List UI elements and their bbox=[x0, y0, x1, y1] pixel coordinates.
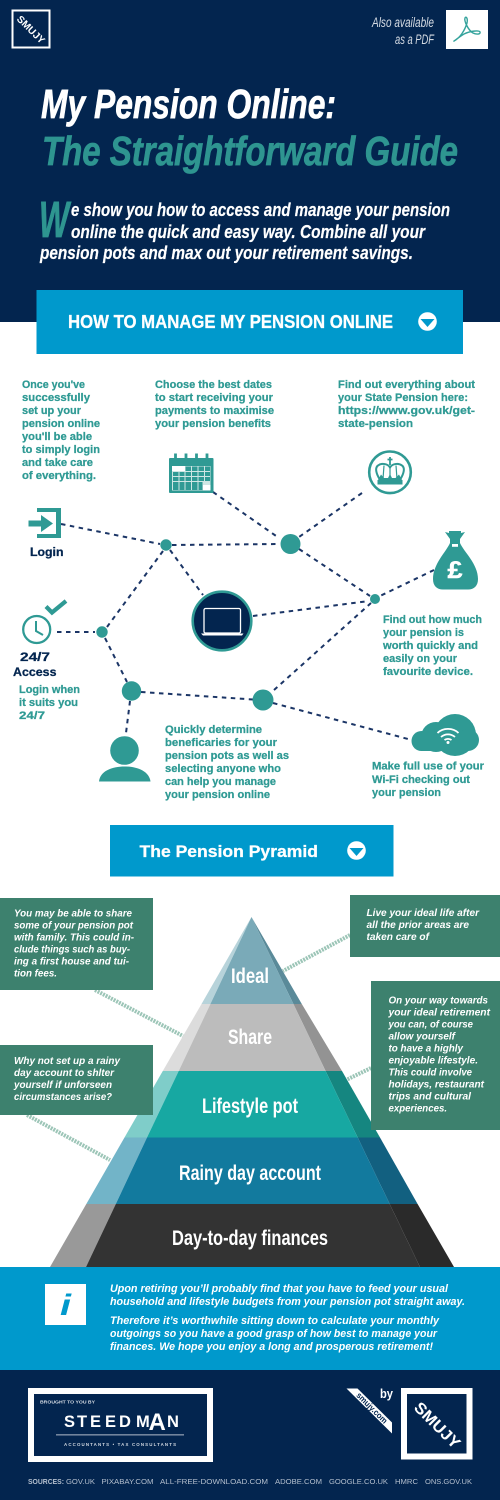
banner: pension pyramid: The Pension Pyramid bbox=[140, 842, 318, 861]
text: beneficiaries bbox=[165, 724, 289, 801]
chart: network connections bbox=[57, 492, 434, 739]
text: available as PDF bbox=[371, 15, 435, 47]
pyramid tier: rainy day account: Rainy day account bbox=[179, 1162, 321, 1185]
callout: lifestyle: to have a highly bbox=[388, 1044, 464, 1054]
text: introduction: W bbox=[39, 191, 71, 248]
pyramid tier: share bbox=[163, 1004, 342, 1071]
text: set up: successfully bbox=[22, 392, 90, 404]
text: set up: you'll be able bbox=[22, 431, 92, 443]
callout: lifestyle: On your way towards bbox=[388, 996, 488, 1006]
logo: Steedman: BROUGHT TO YOU BY bbox=[40, 1400, 95, 1404]
logo: Steedman: ACCOUNTANTS • TAX CONSULTANTS bbox=[64, 1442, 176, 1447]
callout: rainy day bbox=[0, 1045, 153, 1115]
text: how much bbox=[382, 614, 482, 678]
text: best dates: your pension benefits bbox=[155, 418, 271, 430]
text: sources: SOURCES: bbox=[28, 1477, 64, 1486]
icon: calendar bbox=[169, 454, 214, 493]
text: set up: pension online bbox=[22, 418, 100, 430]
text: how much: your pension is bbox=[383, 627, 464, 639]
text: available as PDF: Also available bbox=[371, 15, 434, 30]
callout: lifestyle: holidays, restaurant bbox=[388, 1080, 485, 1090]
text: set up: and take care bbox=[22, 457, 93, 469]
text: state pension: https://www.gov.uk/get- bbox=[338, 405, 475, 417]
text: note: finances. We hope you enjoy a long and prosperous retirement! bbox=[110, 1341, 433, 1353]
logo: Steedman: A bbox=[148, 1409, 166, 1436]
label: 24/7 access: Access bbox=[13, 665, 57, 679]
callout: rainy day: circumstances arise? bbox=[14, 1092, 113, 1103]
icon: laptop bbox=[193, 592, 251, 650]
callout: lifestyle: you can, of course bbox=[388, 1020, 473, 1030]
logo: Steedman: N bbox=[167, 1413, 179, 1431]
icon: down arrow bbox=[347, 841, 366, 860]
text: login 24/7 bbox=[19, 684, 80, 722]
callout: rainy day: yourself if unforseen bbox=[13, 1080, 112, 1091]
text: wi-fi bbox=[372, 760, 485, 799]
title bbox=[41, 81, 458, 174]
label: 24/7 access: 24/7 bbox=[20, 650, 50, 664]
icon: PDF bbox=[446, 10, 488, 49]
logo: Steedman: STEEDM bbox=[64, 1413, 150, 1431]
callout: lifestyle: This could involve bbox=[388, 1068, 472, 1078]
pyramid tier: lifestyle pot bbox=[124, 1071, 380, 1138]
text: sources: ADOBE.COM bbox=[275, 1477, 322, 1486]
text: wi-fi: Wi-Fi checking out bbox=[372, 774, 470, 786]
text: wi-fi: your pension bbox=[372, 787, 441, 799]
callout: rainy day: Why not set up a rainy bbox=[14, 1056, 121, 1067]
text: set up: Once you've bbox=[22, 379, 85, 391]
text: note bbox=[110, 1283, 465, 1353]
callout: share: with family. This could in- bbox=[14, 932, 135, 944]
text: beneficiaries: pension pots as well as bbox=[165, 750, 289, 762]
callout: lifestyle: trips and cultural bbox=[388, 1092, 471, 1102]
icon: login bbox=[28, 508, 61, 538]
text: set up: of everything. bbox=[22, 470, 96, 482]
pyramid tier: day-to-day finances: Day-to-day finances bbox=[172, 1227, 328, 1250]
text: sources: PIXABAY.COM bbox=[102, 1477, 154, 1486]
text: sources: ALL-FREE-DOWNLOAD.COM bbox=[160, 1477, 268, 1486]
text: best dates: payments to maximise bbox=[155, 405, 274, 417]
callout: share: clude things such as buy- bbox=[14, 944, 131, 956]
text: introduction: pension pots and max out your retirement savings. bbox=[39, 242, 413, 263]
text: note: household and lifestyle budgets from your pension pot straight away. bbox=[110, 1296, 465, 1308]
logo: smujy.com ribbon bbox=[346, 1388, 392, 1434]
text: beneficiaries: selecting anyone who bbox=[165, 763, 281, 775]
callout connectors bbox=[27, 935, 371, 1160]
callout: lifestyle bbox=[371, 981, 500, 1130]
text: beneficiaries: can help you manage bbox=[165, 776, 276, 788]
pyramid tier: lifestyle pot: Lifestyle pot bbox=[202, 1095, 298, 1118]
callout: lifestyle: enjoyable lifestyle. bbox=[388, 1056, 478, 1066]
icon: wifi cloud bbox=[412, 714, 479, 756]
icon: money bag: £ bbox=[448, 557, 463, 584]
panel: header bbox=[0, 0, 500, 322]
callout: share bbox=[0, 898, 153, 990]
logo: Smujy large bbox=[404, 1391, 470, 1456]
text: sources bbox=[28, 1477, 472, 1486]
callout: share: You may be able to share bbox=[14, 908, 132, 920]
banner: how to manage bbox=[36, 290, 463, 354]
title: My Pension Online: bbox=[41, 81, 336, 127]
banner: pension pyramid bbox=[110, 825, 394, 876]
text: login 24/7: Login when bbox=[19, 684, 80, 696]
logo: Smujy large: SMUJY bbox=[410, 1399, 463, 1453]
icon: clock bbox=[23, 601, 66, 643]
text: introduction: online the quick and easy way. Combine all your bbox=[71, 221, 426, 242]
callout: share: some of your pension pot bbox=[14, 920, 134, 932]
panel: retirement note bbox=[0, 1267, 500, 1370]
pyramid tier: ideal bbox=[202, 917, 302, 1004]
text: state pension bbox=[338, 379, 475, 430]
panel: footer bbox=[0, 1370, 500, 1500]
text: best dates: Choose the best dates bbox=[155, 379, 272, 391]
pyramid tier: share: Share bbox=[228, 1026, 272, 1049]
text: how much: favourite device. bbox=[383, 666, 473, 678]
logo: Steedman bbox=[31, 1391, 210, 1459]
text: how much: worth quickly and bbox=[382, 640, 478, 652]
callout: share: ing a first house and tui- bbox=[14, 956, 130, 968]
logo: Smujy: SMUJY bbox=[14, 14, 47, 47]
logo: smujy.com ribbon: smujy.com bbox=[354, 1390, 390, 1426]
text: note: outgoings so you have a good grasp of how best to manage your bbox=[110, 1328, 438, 1340]
text: state pension: state-pension bbox=[338, 418, 413, 430]
icon: money bag bbox=[433, 531, 478, 590]
icon: info: i bbox=[60, 1289, 72, 1322]
label: login: Login bbox=[30, 547, 64, 559]
chart: pyramid bbox=[50, 917, 454, 1267]
pyramid tier: rainy day account bbox=[86, 1138, 418, 1204]
callout: ideal bbox=[350, 895, 500, 957]
text: set up bbox=[22, 379, 100, 482]
icon: person bbox=[99, 736, 150, 782]
text: available as PDF: as a PDF bbox=[395, 32, 435, 47]
text: note: Upon retiring you’ll probably find that you have to feed your usual bbox=[110, 1283, 449, 1295]
text: sources: HMRC bbox=[395, 1477, 419, 1486]
text: login 24/7: it suits you bbox=[19, 697, 78, 709]
text: sources: GOV.UK bbox=[66, 1477, 95, 1486]
pyramid tier: day-to-day finances bbox=[50, 1204, 454, 1267]
text: by: by bbox=[380, 1387, 393, 1401]
callout: ideal: all the prior areas are bbox=[366, 920, 469, 931]
callout: share: tion fees. bbox=[14, 968, 57, 980]
text: set up: set up your bbox=[22, 405, 82, 417]
text: how much: easily on your bbox=[383, 653, 458, 665]
callout: rainy day: day account to shlter bbox=[14, 1068, 115, 1079]
text: beneficiaries: Quickly determine bbox=[165, 724, 262, 736]
pyramid tier: ideal: Ideal bbox=[231, 965, 269, 988]
text: best dates bbox=[155, 379, 274, 430]
icon: crown bbox=[369, 452, 411, 493]
text: sources: ONS.GOV.UK bbox=[425, 1477, 472, 1486]
text: how much: Find out how much bbox=[383, 614, 482, 626]
text: beneficiaries: beneficaries for your bbox=[165, 737, 278, 749]
icon: down arrow bbox=[418, 312, 437, 331]
text: state pension: your State Pension here: bbox=[338, 392, 468, 404]
text: introduction bbox=[39, 191, 450, 263]
text: set up: to simply login bbox=[22, 444, 100, 456]
icon: info bbox=[45, 1284, 86, 1325]
callout: ideal: taken care of bbox=[366, 932, 431, 943]
text: beneficiaries: your pension online bbox=[165, 789, 270, 801]
text: sources: GOOGLE.CO.UK bbox=[329, 1477, 388, 1486]
banner: how to manage: HOW TO MANAGE MY PENSION ONLINE bbox=[68, 312, 393, 332]
text: note: Therefore it’s worthwhile sitting down to calculate your monthly bbox=[110, 1315, 440, 1327]
callout: lifestyle: your ideal retirement bbox=[387, 1008, 491, 1018]
text: wi-fi: Make full use of your bbox=[372, 760, 485, 772]
label: 24/7 access bbox=[13, 650, 57, 679]
callout: lifestyle: experiences. bbox=[388, 1104, 447, 1114]
text: login 24/7: 24/7 bbox=[19, 710, 45, 722]
text: state pension: Find out everything about bbox=[338, 379, 475, 391]
text: best dates: to start receiving your bbox=[155, 392, 274, 404]
callout: lifestyle: allow yourself bbox=[388, 1032, 457, 1042]
callout: ideal: Live your ideal life after bbox=[366, 908, 480, 919]
